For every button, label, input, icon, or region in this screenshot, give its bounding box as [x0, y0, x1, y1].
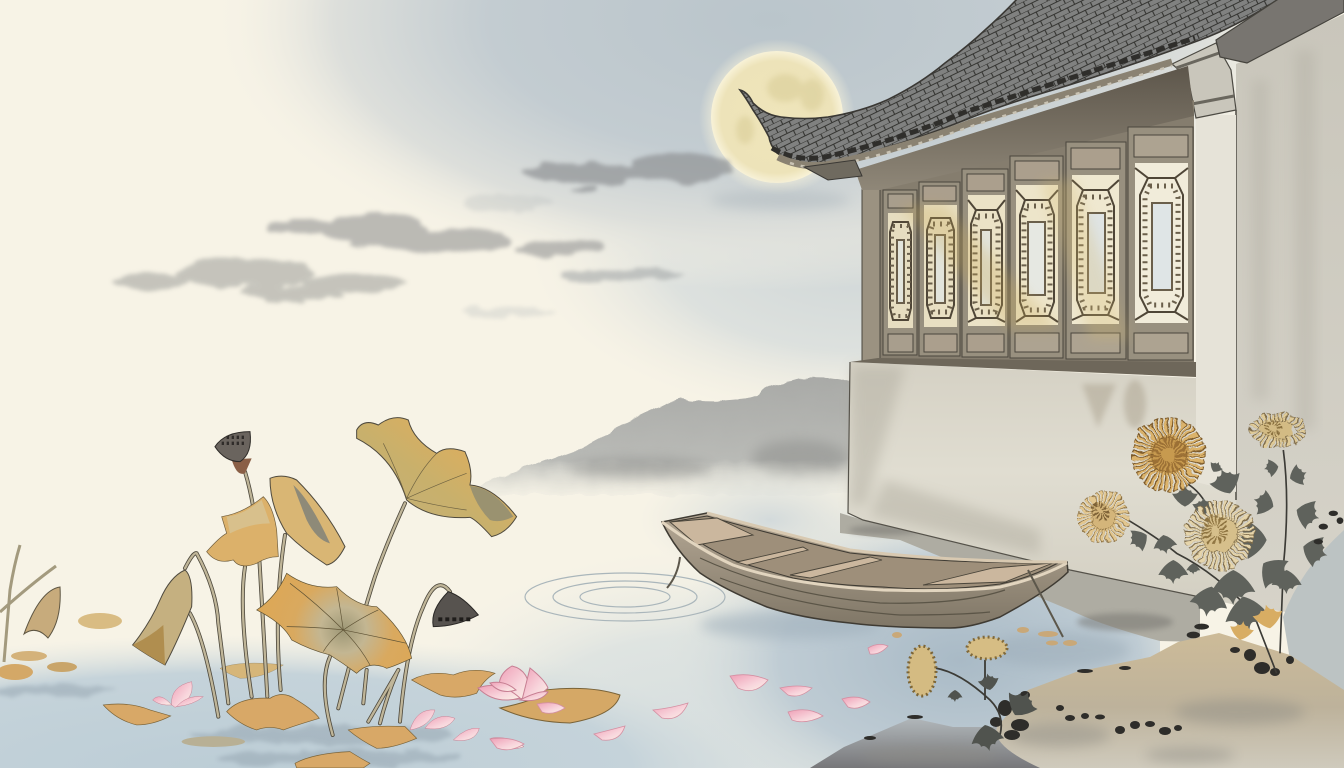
- stone footing of the wall: [840, 513, 1200, 642]
- left pale bloom: [1085, 498, 1122, 535]
- fallen gold petals by the pole: [892, 627, 1077, 646]
- gable slab at top right: [1216, 0, 1344, 63]
- interior: [670, 516, 1058, 589]
- central pale bloom: [1194, 509, 1246, 561]
- pink lotus flower: [478, 666, 548, 701]
- broad flat leaf: [257, 573, 412, 673]
- dark ink dots: [1187, 511, 1343, 638]
- hull: [662, 513, 1068, 628]
- left reeds and pads: [0, 545, 122, 680]
- lotus stems: [185, 472, 450, 735]
- lattice panel 5: [1066, 142, 1126, 359]
- back floating pads: [182, 663, 283, 747]
- lower plastered wall: [848, 362, 1236, 605]
- curled gold leaf: [207, 497, 278, 566]
- rocky shore: [810, 530, 1344, 768]
- window outer frame: [850, 66, 1196, 377]
- tall wind-blown leaf: [357, 418, 517, 537]
- stems: [1117, 450, 1287, 673]
- floating pads: [103, 670, 495, 768]
- lattice panel 3: [962, 169, 1008, 357]
- light streaks across the lattice: [900, 180, 1130, 340]
- lattice panel 1: [883, 190, 917, 355]
- large golden bloom: [1141, 428, 1196, 482]
- chrysanthemum plant: [1085, 417, 1343, 673]
- wooden boat: [662, 513, 1068, 637]
- pink petals left: [153, 682, 524, 749]
- white pillar: [1172, 43, 1236, 492]
- leaves: [1124, 458, 1333, 635]
- full moon: [699, 39, 855, 195]
- clouds: [112, 153, 850, 317]
- deck boards and benches: [670, 518, 1053, 585]
- water: [0, 460, 1160, 768]
- upright lotus pod: [215, 432, 252, 474]
- lattice panel 4: [1010, 156, 1063, 358]
- lattice panel 6: [1128, 127, 1193, 360]
- yellowed leaves: [1228, 602, 1285, 642]
- small chrysanthemums on the shore: [908, 637, 1042, 754]
- lattice panel 2: [919, 182, 960, 356]
- carved window wall: [850, 66, 1196, 377]
- drifting petals: [490, 644, 888, 750]
- misty mountains: [480, 377, 852, 495]
- tiled roof: [740, 0, 1280, 180]
- ripples around the boat: [525, 573, 725, 621]
- drooping seed pod: [433, 592, 478, 627]
- right gable wall: [1236, 14, 1344, 620]
- top pale bloom: [1254, 417, 1302, 443]
- drooping leaf: [133, 570, 192, 665]
- lotus cluster: [103, 418, 524, 768]
- floating pad by the lotus flower: [500, 688, 620, 723]
- folded leaf with grey fold: [270, 476, 345, 565]
